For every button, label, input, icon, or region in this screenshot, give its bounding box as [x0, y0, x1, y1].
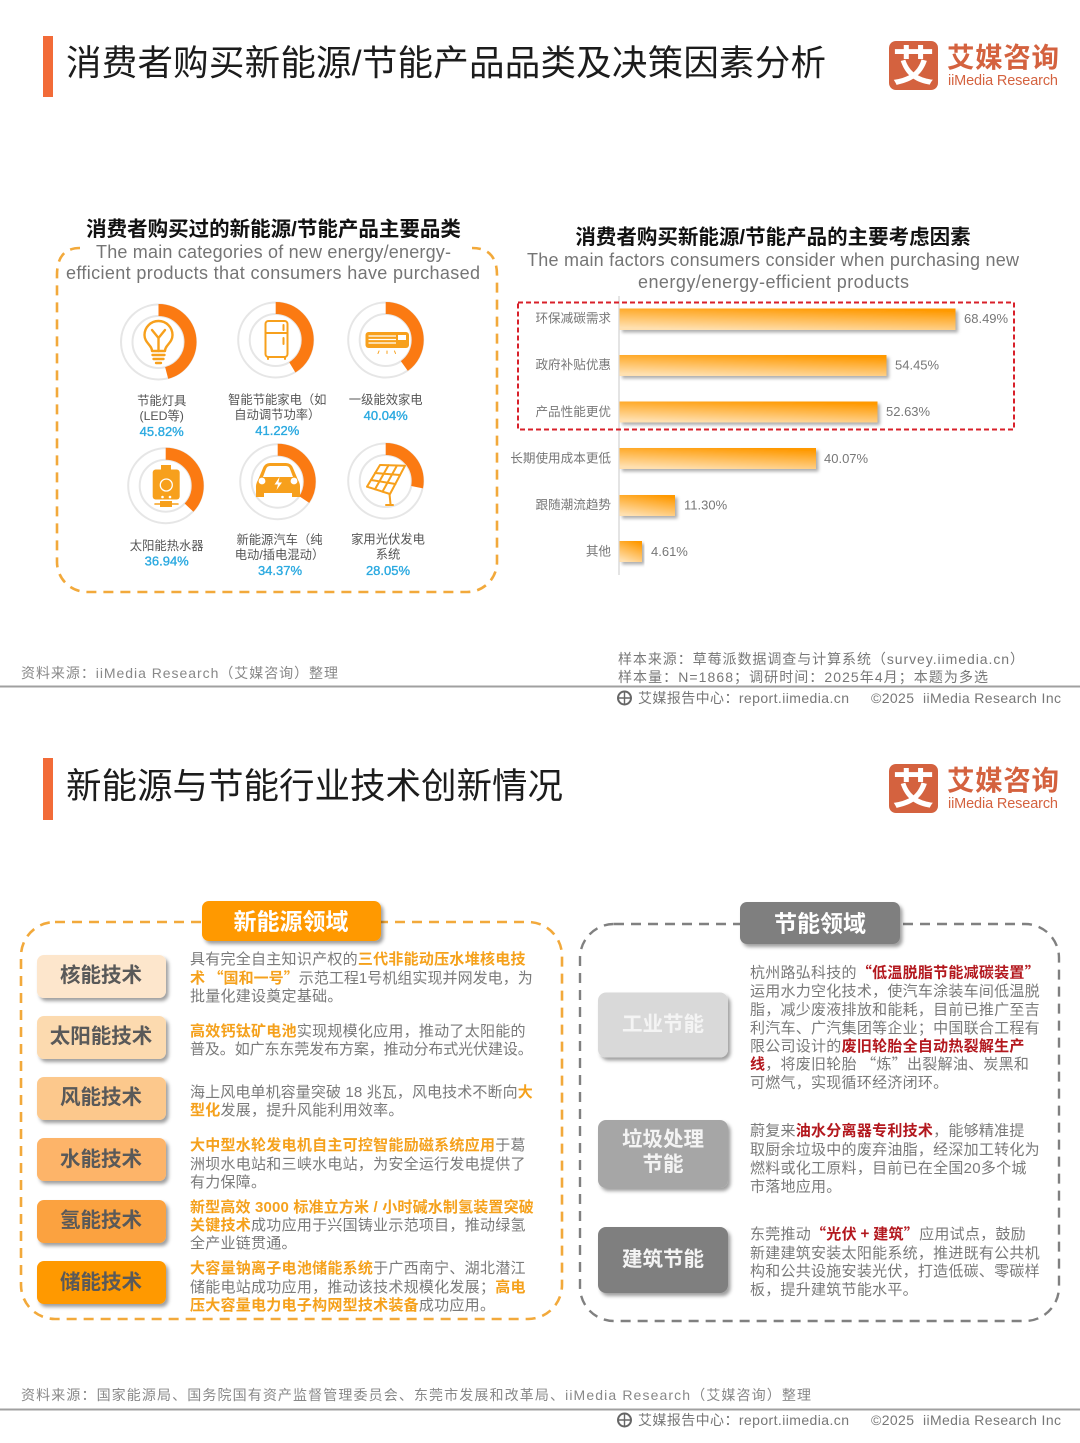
- bar: environmental 68.49%: 68.49%: [964, 311, 1009, 326]
- bar: performance 52.63%: 52.63%: [886, 404, 931, 419]
- donut: tier-1 appliances 40.04%: [348, 302, 423, 378]
- title accent bar: [43, 758, 53, 820]
- panel: new energy field: [21, 901, 562, 1319]
- label: smart appliances: 智能节能家电（如: [228, 392, 326, 407]
- row: industrial: 限公司设计的废旧轮胎全自动热裂解生产: [750, 1037, 1025, 1055]
- heading: energy saving field: 节能领域: [774, 910, 866, 936]
- row: solar: 太阳能技术: [50, 1025, 153, 1048]
- label: smart appliances: 自动调节功率）: [234, 407, 320, 422]
- bar: trend 11.30%: 跟随潮流趋势: [535, 497, 611, 512]
- copyright: ©2025 iiMedia Research Inc: [871, 1412, 1061, 1428]
- logo: iiMedia Research: iiMedia Research: [948, 73, 1058, 89]
- panel: purchase decision factors: [510, 225, 1020, 575]
- bar: trend 11.30%: [535, 495, 728, 516]
- row: nuclear: [37, 950, 533, 1005]
- subtitle: categories: efficient products that consumers have purchased: [66, 263, 480, 283]
- bar: lower long-term cost 40.07%: 40.07%: [824, 451, 869, 466]
- bar: environmental 68.49%: [535, 308, 1009, 330]
- row: industrial: 运用水力空化技术，使汽车涂装车间低温脱: [750, 983, 1040, 1000]
- logo: iiMedia Research: [889, 764, 1059, 813]
- title: 新能源与节能行业技术创新情况: [66, 766, 563, 806]
- label: LED lamps: 45.82%: [140, 424, 184, 439]
- label: smart appliances: [228, 392, 326, 438]
- source note: 资料来源：iiMedia Research（艾媒咨询）整理: [21, 665, 338, 681]
- heading: energy saving field: [740, 902, 900, 944]
- subtitle: categories: The main categories of new energy/energy-: [96, 242, 451, 262]
- row: solar: 普及。如广东东莞发布方案，推动分布式光伏建设。: [190, 1040, 533, 1058]
- bar: other 4.61%: 4.61%: [651, 544, 688, 559]
- subtitle: factors: The main factors consumers consider when purchasing new: [527, 250, 1020, 270]
- label: LED lamps: (LED等): [139, 408, 184, 423]
- row: storage: [37, 1259, 526, 1314]
- row: wind: 海上风电单机容量突破 18 兆瓦，风电技术不断向大: [190, 1083, 533, 1101]
- label: home PV: 家用光伏发电: [351, 532, 425, 546]
- label: solar water heater: [130, 538, 204, 568]
- subtitle: categories: [66, 242, 480, 283]
- bar: lower long-term cost 40.07%: [510, 448, 869, 469]
- bar: environmental 68.49%: 环保减碳需求: [535, 312, 611, 326]
- icon: water heater: [153, 465, 180, 507]
- bar: performance 52.63%: 产品性能更优: [535, 405, 611, 419]
- callout: top three factors highlight: [518, 302, 1014, 430]
- row: nuclear: 术 “国和一号”示范工程1号机组实现并网发电，为: [190, 967, 533, 988]
- heading: new energy field: 新能源领域: [234, 908, 348, 934]
- dashed panel border: [57, 248, 497, 592]
- row: industrial: 脂，减少废液排放和能耗，目前已推广至吉: [750, 1002, 1040, 1018]
- label: tier-1 appliances: 一级能效家电: [349, 392, 423, 407]
- heading: categories: 消费者购买过的新能源/节能产品主要品类: [86, 217, 461, 241]
- row: hydro: 大中型水轮发电机自主可控智能励磁系统应用于葛: [190, 1136, 526, 1154]
- row: industrial: 可燃气，实现循环经济闭环。: [750, 1074, 948, 1092]
- row: nuclear: 核能技术: [60, 963, 142, 987]
- row: hydrogen: 氢能技术: [60, 1208, 142, 1232]
- row: storage: 大容量钠离子电池储能系统于广西南宁、湖北潜江: [190, 1259, 526, 1277]
- row: waste: 垃圾处理: [622, 1127, 704, 1151]
- panel: top slide header: [43, 36, 1059, 97]
- bar: subsidies 54.45%: 54.45%: [895, 358, 940, 372]
- row: solar: 高效钙钛矿电池实现规模化应用，推动了太阳能的: [190, 1022, 526, 1040]
- row: hydrogen: 全产业链贯通。: [190, 1234, 297, 1252]
- icon: air conditioner: [366, 332, 409, 354]
- label: home PV: 系统: [376, 548, 400, 562]
- label: LED lamps: 节能灯具: [137, 394, 186, 408]
- label: home PV: 28.05%: [366, 563, 410, 578]
- bar: other 4.61%: 其他: [586, 544, 611, 558]
- icon: light bulb: [144, 321, 172, 363]
- donut: new energy vehicles 34.37%: [240, 444, 315, 519]
- row: waste: [598, 1120, 1040, 1196]
- sample note: [618, 651, 1024, 686]
- row: building: [598, 1223, 1040, 1298]
- logo: iiMedia Research: 艾媒咨询: [947, 42, 1059, 73]
- bar: lower long-term cost 40.07%: 长期使用成本更低: [510, 450, 611, 466]
- label: tier-1 appliances: 40.04%: [364, 408, 408, 423]
- logo: iiMedia Research: 艾媒咨询: [947, 765, 1059, 796]
- logo: iiMedia Research: iiMedia Research: [948, 796, 1058, 812]
- heading: factors: 消费者购买新能源/节能产品的主要考虑因素: [575, 225, 971, 249]
- panel: energy saving field: [580, 902, 1059, 1321]
- label: new energy vehicles: [235, 532, 324, 578]
- bar chart: factors: [510, 296, 1009, 575]
- bar: subsidies 54.45%: [535, 355, 940, 376]
- row: storage: 储能电站成功应用，推动该技术规模化发展；高电: [190, 1278, 526, 1296]
- row: industrial: 杭州路弘科技的“低温脱脂节能减碳装置”: [750, 962, 1040, 982]
- row: waste: 蔚复来油水分离器专利技术，能够精准提: [750, 1122, 1025, 1140]
- bar: trend 11.30%: 11.30%: [684, 498, 728, 512]
- icon: globe: [618, 1413, 631, 1427]
- icon: globe: [618, 691, 631, 705]
- panel: bottom slide header: [43, 758, 1059, 820]
- footer: bottom slide: [0, 1387, 1080, 1428]
- logo: iiMedia Research: 艾: [892, 43, 935, 90]
- row: industrial: 线，将废旧轮胎 “炼”出裂解油、炭黑和: [750, 1053, 1029, 1074]
- row: waste: 节能: [642, 1153, 684, 1176]
- label: new energy vehicles: 34.37%: [258, 563, 302, 578]
- row: wind: [37, 1077, 533, 1120]
- label: solar water heater: 太阳能热水器: [130, 538, 204, 553]
- report center link: 艾媒报告中心：report.iimedia.cn: [638, 1412, 849, 1428]
- icon: fridge: [266, 321, 288, 359]
- label: smart appliances: 41.22%: [255, 423, 300, 438]
- bar: performance 52.63%: [535, 402, 931, 422]
- row: waste: 取厨余垃圾中的废弃油脂，经深加工转化为: [750, 1140, 1040, 1158]
- icon: solar panel: [367, 465, 405, 505]
- dashed panel border: [580, 924, 1059, 1321]
- row: industrial: 工业节能: [622, 1013, 704, 1036]
- sample note: 样本量：N=1868；调研时间：2025年4月；本题为多选: [618, 669, 988, 686]
- row: hydrogen: 关键技术成功应用于兴国铸业示范项目，推动绿氢: [190, 1216, 526, 1234]
- report center link: 艾媒报告中心：report.iimedia.cn: [638, 690, 849, 706]
- source note: 资料来源：国家能源局、国务院国有资产监督管理委员会、东莞市发展和改革局、iiMedia Research（艾媒咨询）整理: [21, 1387, 811, 1403]
- label: new energy vehicles: 电动/插电混动）: [235, 548, 324, 562]
- copyright: ©2025 iiMedia Research Inc: [871, 690, 1061, 706]
- row: building: 东莞推动“光伏 + 建筑”应用试点，鼓励: [750, 1223, 1026, 1244]
- row: wind: 型化发展，提升风能利用效率。: [190, 1101, 404, 1119]
- label: tier-1 appliances: [349, 392, 423, 423]
- row: solar: [37, 1016, 533, 1059]
- donut: LED lamps 45.82%: [121, 304, 196, 380]
- dashed panel border: [21, 922, 562, 1319]
- donut: solar water heater 36.94%: [128, 448, 203, 523]
- title accent bar: [43, 36, 53, 97]
- row: storage: 储能技术: [60, 1271, 142, 1294]
- label: home PV: [351, 532, 425, 578]
- row: industrial: 利汽车、广汽集团等企业；中国联合工程有: [750, 1019, 1040, 1037]
- label: LED lamps: [137, 394, 186, 439]
- logo: iiMedia Research: 艾: [892, 766, 935, 813]
- row: hydro: 洲坝水电站和三峡水电站，为安全运行发电提供了: [190, 1155, 526, 1173]
- row: hydrogen: [37, 1198, 534, 1252]
- row: hydro: 水能技术: [60, 1148, 142, 1171]
- row: building: 构和公共设施安装光伏，打造低碳、零碳样: [750, 1263, 1040, 1280]
- row: waste: 燃料或化工原料，目前已在全国20多个城: [750, 1159, 1027, 1177]
- title: 消费者购买新能源/节能产品品类及决策因素分析: [66, 43, 826, 83]
- subtitle: factors: [527, 250, 1020, 292]
- row: building: 新建建筑安装太阳能系统，推进既有公共机: [750, 1245, 1040, 1262]
- label: new energy vehicles: 新能源汽车（纯: [236, 532, 323, 547]
- row: nuclear: 批量化建设奠定基础。: [190, 988, 343, 1005]
- donut: home PV 28.05%: [348, 444, 423, 518]
- bar: subsidies 54.45%: 政府补贴优惠: [535, 358, 611, 372]
- subtitle: factors: energy/energy-efficient products: [638, 272, 909, 292]
- logo: iiMedia Research: [889, 41, 1059, 90]
- row: wind: 风能技术: [60, 1086, 142, 1109]
- row: building: 板，提升建筑节能水平。: [750, 1280, 918, 1298]
- row: waste: 市落地应用。: [750, 1178, 842, 1196]
- row: hydrogen: 新型高效 3000 标准立方米 / 小时碱水制氢装置突破: [190, 1198, 534, 1216]
- row: hydro: 有力保障。: [190, 1173, 266, 1191]
- label: solar water heater: 36.94%: [145, 554, 189, 568]
- donut: smart appliances 41.22%: [238, 302, 313, 378]
- icon: electric car: [256, 463, 300, 497]
- bar: other 4.61%: [586, 541, 688, 562]
- footer: top slide: [0, 651, 1080, 706]
- sample note: 样本来源：草莓派数据调查与计算系统（survey.iimedia.cn）: [618, 651, 1024, 667]
- row: nuclear: 具有完全自主知识产权的三代非能动压水堆核电技: [190, 950, 526, 968]
- row: industrial: [598, 962, 1040, 1092]
- row: building: 建筑节能: [622, 1247, 704, 1271]
- panel: product categories purchased: [57, 217, 497, 592]
- heading: new energy field: [202, 901, 381, 941]
- row: hydro: [37, 1136, 526, 1191]
- row: storage: 压大容量电力电子构网型技术装备成功应用。: [190, 1296, 495, 1314]
